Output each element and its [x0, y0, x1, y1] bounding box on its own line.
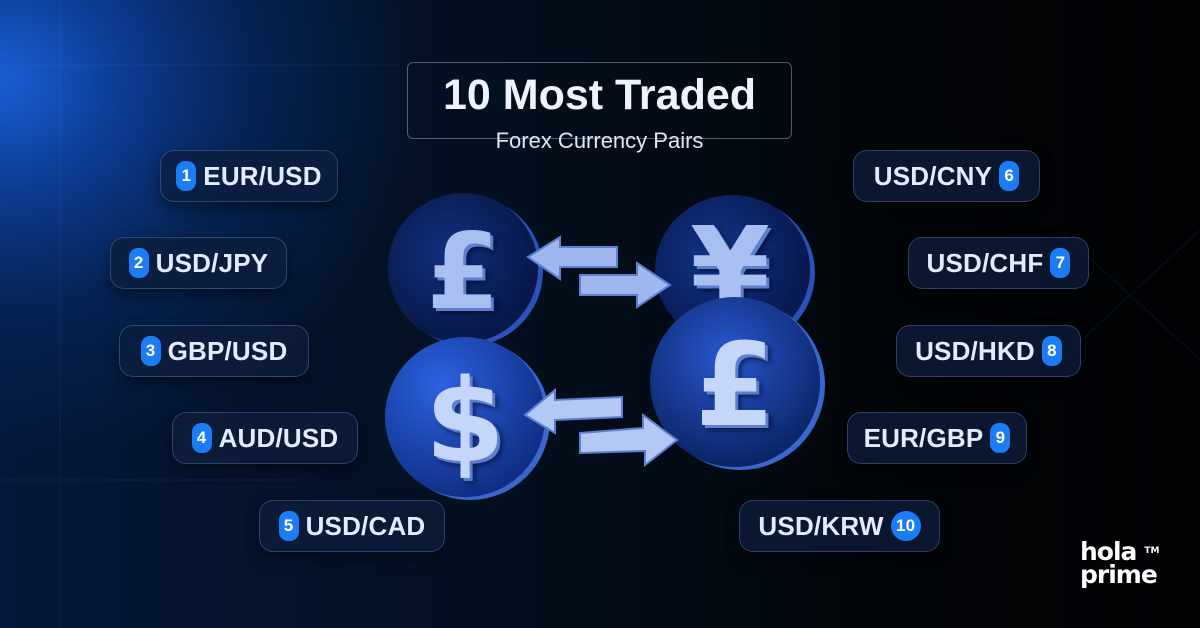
pill 7: 7	[1056, 253, 1065, 272]
pill 2	[110, 237, 287, 289]
pill 5: USD/CAD	[306, 510, 425, 540]
subtitle: Forex Currency Pairs	[496, 128, 703, 153]
coin: pound bottom-right: £	[695, 319, 775, 453]
pill 7	[908, 237, 1089, 289]
logo: hola TM	[1080, 537, 1160, 566]
coin: dollar bottom-left: $	[425, 355, 505, 489]
illustration: coins and arrows	[385, 193, 825, 500]
pill 6: USD/CNY	[874, 160, 992, 190]
pill 1: EUR/USD	[203, 160, 322, 190]
coin: pound top-left: £	[426, 211, 500, 333]
pill 4	[172, 412, 358, 464]
pill 10	[739, 500, 940, 552]
pill 7: USD/CHF	[927, 248, 1043, 278]
pill 3: 3	[146, 341, 155, 360]
title: 10 Most Traded	[443, 71, 756, 119]
pill 9	[847, 412, 1027, 464]
pill 3	[119, 325, 309, 377]
coin: pound top-left	[388, 193, 538, 343]
pill 8: 8	[1047, 341, 1057, 360]
pill 5: 5	[284, 516, 293, 535]
pill 1	[160, 150, 338, 202]
coin: dollar bottom-left	[385, 337, 545, 497]
pill 3: GBP/USD	[168, 336, 287, 366]
logo: prime	[1080, 560, 1157, 589]
pill 10: 10	[896, 516, 915, 535]
coin: yen top-right	[655, 195, 810, 345]
pill 6	[853, 150, 1040, 202]
pill 1: 1	[181, 166, 191, 185]
coin: pound bottom-right	[650, 297, 820, 467]
pill 9: 9	[996, 428, 1005, 447]
pill 6: 6	[1004, 166, 1014, 185]
arrows	[523, 235, 678, 467]
pill 4: AUD/USD	[219, 422, 338, 452]
pill 8: USD/HKD	[915, 336, 1035, 366]
pill 8	[896, 325, 1081, 377]
logo	[1080, 537, 1160, 589]
pill 10: USD/KRW	[758, 510, 884, 540]
pill 5	[259, 500, 445, 552]
pill 2: 2	[134, 253, 143, 272]
pill 4: 4	[197, 428, 206, 447]
title box	[407, 62, 792, 139]
pill 2: USD/JPY	[156, 248, 268, 278]
pill 9: EUR/GBP	[864, 422, 983, 452]
coin: yen top-right: ¥	[690, 203, 770, 337]
